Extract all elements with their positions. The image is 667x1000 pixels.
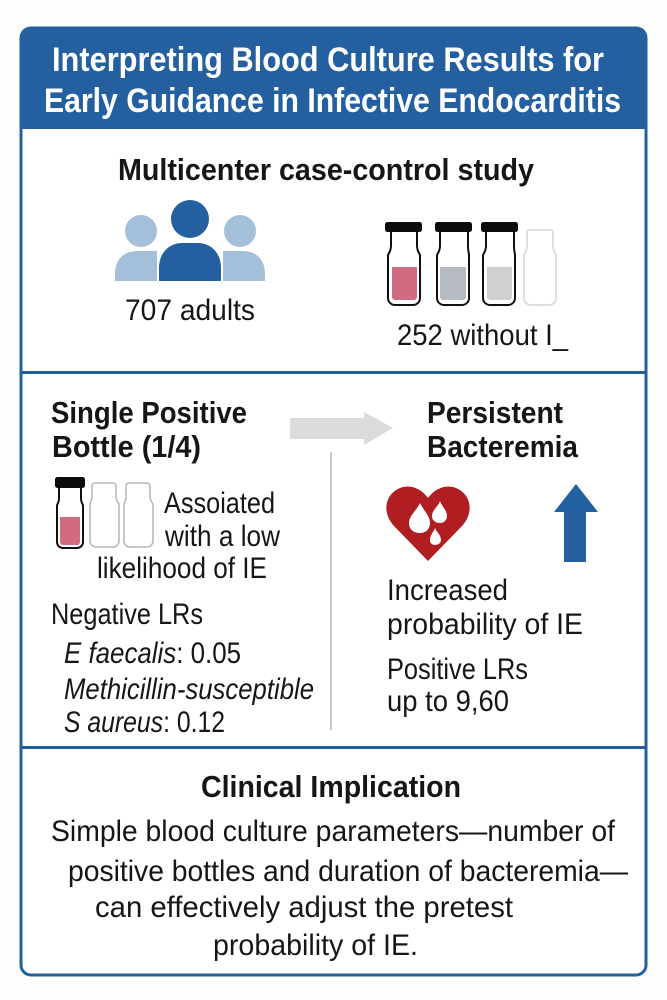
text: low likelihood: with a low <box>164 520 280 553</box>
icon: heart with blood drops <box>386 487 470 561</box>
heading: persistent bacteremia: Persistent <box>427 395 563 430</box>
heading: study design: Multicenter case-control study <box>118 152 535 187</box>
icon: group of people <box>115 200 265 281</box>
panel: persistent bacteremia <box>386 395 598 718</box>
arrow: single bottle to persistent bacteremia <box>290 412 393 445</box>
text: implication summary: can effectively adjust the pretest <box>95 891 514 924</box>
text: increased probability: Increased <box>387 574 508 607</box>
panel: clinical implication <box>51 769 628 962</box>
text: increased probability: probability of IE <box>387 608 583 641</box>
icon: four culture bottles <box>385 222 556 305</box>
heading: single positive bottle: Bottle (1/4) <box>52 429 201 464</box>
title banner <box>20 27 647 129</box>
text: negative likelihood ratios: Methicillin-susceptible <box>64 673 314 706</box>
icon: one positive bottle of three <box>55 477 153 548</box>
heading: clinical implication: Clinical Implication <box>201 769 461 804</box>
text: negative likelihood ratios: E faecalis: 0.05 <box>64 637 241 670</box>
heading: single positive bottle <box>51 395 247 464</box>
divider: findings to implication <box>21 746 646 749</box>
text: negative likelihood ratios: S aureus: 0.12 <box>64 706 225 739</box>
label: adults: 707 adults <box>125 294 255 327</box>
heading: single positive bottle: Single Positive <box>51 395 247 430</box>
text: increased probability <box>387 574 583 641</box>
divider: study to findings <box>21 371 646 374</box>
text: implication summary: positive bottles and duration of bacteremia— <box>68 855 628 888</box>
text: low likelihood: likelihood of IE <box>97 552 267 585</box>
text: negative likelihood ratios: Negative LRs <box>51 598 203 631</box>
text: implication summary: probability of IE. <box>213 929 418 962</box>
panel: single positive bottle <box>51 395 314 739</box>
heading: persistent bacteremia <box>427 395 579 464</box>
text: positive likelihood ratios: up to 9,60 <box>387 685 509 718</box>
title banner: Interpreting Blood Culture Results for <box>52 41 604 79</box>
icon: up arrow <box>554 484 598 562</box>
text: implication summary: Simple blood culture parameters—number of <box>51 815 616 848</box>
text: implication summary <box>51 815 628 962</box>
label: controls without IE: 252 without I_ <box>397 319 569 352</box>
text: negative likelihood ratios <box>51 598 314 739</box>
text: positive likelihood ratios <box>387 653 528 718</box>
panel: study design <box>115 152 569 352</box>
text: low likelihood: Assoiated <box>164 487 275 520</box>
divider: findings columns <box>330 452 332 730</box>
heading: persistent bacteremia: Bacteremia <box>427 429 579 464</box>
text: low likelihood <box>97 487 280 585</box>
text: positive likelihood ratios: Positive LRs <box>387 653 528 686</box>
